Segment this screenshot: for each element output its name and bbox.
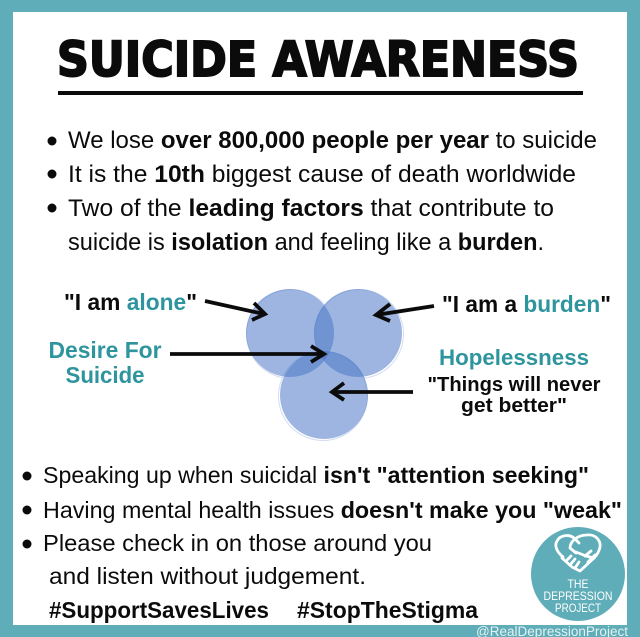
title: SUICIDE AWARENESS [57,32,579,88]
venn diagram [246,289,404,440]
label: desire for suicide [48,337,162,388]
label: things will never get better: "Things will never [428,373,601,396]
label: I am a burden: "I am a burden" [442,291,611,317]
bottom bullet list: Having mental health issues doesn't make you "weak" [43,497,622,523]
label: I am alone: "I am alone" [64,289,197,315]
hashtags: #SupportSavesLives [49,597,269,623]
label: desire for suicide: Desire For [48,337,162,363]
arrow: alone [205,301,265,320]
label: desire for suicide: Suicide [66,362,144,388]
label: hopelessness: Hopelessness [439,345,589,370]
label: things will never get better: get better" [461,394,567,417]
top bullet list [48,127,597,256]
logo: The Depression Project: THE [568,577,588,591]
arrow: desire [170,346,324,362]
bottom bullet list: Please check in on those around you [43,530,432,556]
arrow: hopelessness [332,383,413,400]
top bullet list: Two of the leading factors that contribute to [68,195,554,222]
top bullet list: We lose over 800,000 people per year to suicide [68,127,597,154]
hashtags [49,597,478,623]
label: things will never get better [428,373,601,417]
bottom bullet list [22,462,622,589]
top bullet list: It is the 10th biggest cause of death worldwide [68,161,576,188]
logo: The Depression Project: PROJECT [555,601,602,615]
top bullet list: suicide is isolation and feeling like a burden. [68,229,544,256]
logo: The Depression Project [531,527,625,621]
bottom bullet list: and listen without judgement. [49,563,366,589]
arrow: burden [376,304,434,321]
bottom bullet list: Speaking up when suicidal isn't "attention seeking" [43,462,589,488]
logo: The Depression Project: DEPRESSION [544,589,612,603]
hashtags: #StopTheStigma [297,597,478,623]
icon: heart with handshake [556,535,600,571]
